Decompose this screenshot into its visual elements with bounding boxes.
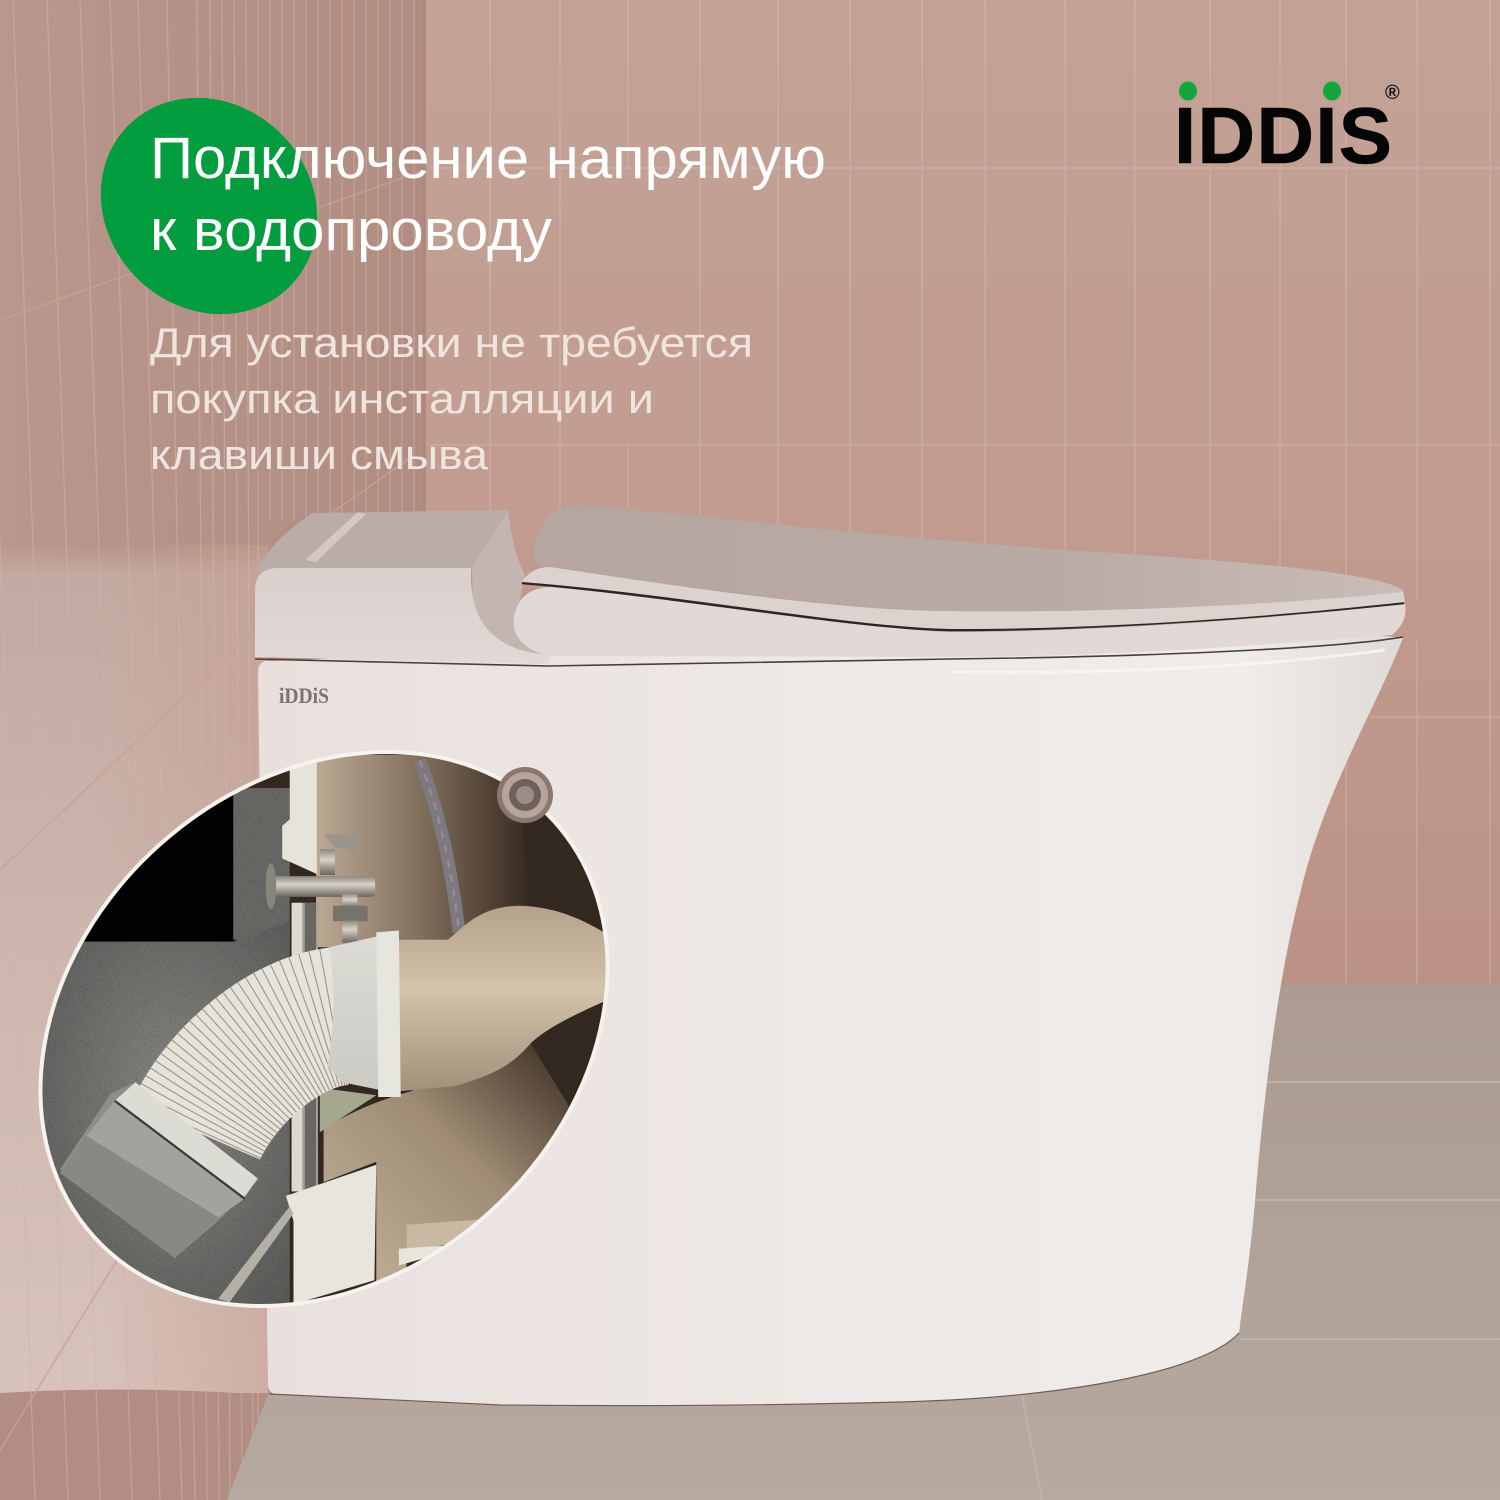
tank side recess: [472, 510, 550, 656]
registered mark: ®: [1385, 82, 1400, 104]
green ribbed backing: [320, 1088, 376, 1132]
upper white panel: [282, 758, 317, 874]
concrete floor: [30, 921, 290, 1317]
corrugated pipe: [196, 1016, 346, 1131]
lower white panel: [286, 1165, 376, 1304]
toilet: [255, 505, 1405, 1406]
lower beige housing: [324, 1043, 576, 1284]
right wall with tiles: [420, 0, 1500, 990]
sunlight patch: [0, 545, 268, 1393]
valve: [266, 834, 375, 943]
gap line under tank and seat: [255, 637, 1403, 666]
housing band: [406, 1220, 478, 1248]
title: Подключение напрямую: [150, 126, 826, 191]
metal strut: [218, 1206, 293, 1302]
beige pipe: [397, 906, 610, 1092]
lid rim: [522, 567, 1405, 629]
logo dots: [1179, 82, 1341, 100]
title: [150, 126, 826, 263]
body bottom contact line: [270, 1333, 1239, 1406]
left wall with narrow tiles: [0, 0, 426, 1500]
seat: [514, 587, 1405, 657]
beige back wall: [316, 755, 531, 947]
title: к водопроводу: [150, 198, 552, 263]
description text: клавиши смыва: [150, 431, 489, 478]
floor: [227, 985, 1500, 1500]
concrete block: [233, 788, 290, 940]
description text: [150, 319, 753, 478]
green blob: [56, 53, 362, 359]
cutaway lens: [38, 750, 610, 1308]
tank top face: [256, 510, 508, 572]
pipe end collar: [60, 1082, 258, 1258]
toilet body: [258, 634, 1403, 1406]
logo: IDDIS: [1174, 91, 1392, 180]
shadow band: [0, 1389, 268, 1500]
lid top: [533, 505, 1403, 611]
description text: покупка инсталляции и: [150, 375, 654, 422]
description text: Для установки не требуется: [150, 319, 753, 366]
tank button: [305, 512, 366, 562]
small logo on toilet: iDDiS: [279, 683, 329, 708]
body top highlight: [950, 650, 1385, 672]
dark background: [84, 754, 604, 1302]
base strip: [398, 1246, 444, 1266]
frame strip: [292, 903, 318, 1191]
coupler: [327, 936, 378, 1090]
lens outline: [0, 638, 720, 1420]
tank front face: [255, 568, 551, 664]
flush button: [497, 767, 553, 823]
gap line under lid: [522, 583, 1404, 630]
hose: [420, 760, 459, 932]
black niche: [84, 795, 236, 942]
